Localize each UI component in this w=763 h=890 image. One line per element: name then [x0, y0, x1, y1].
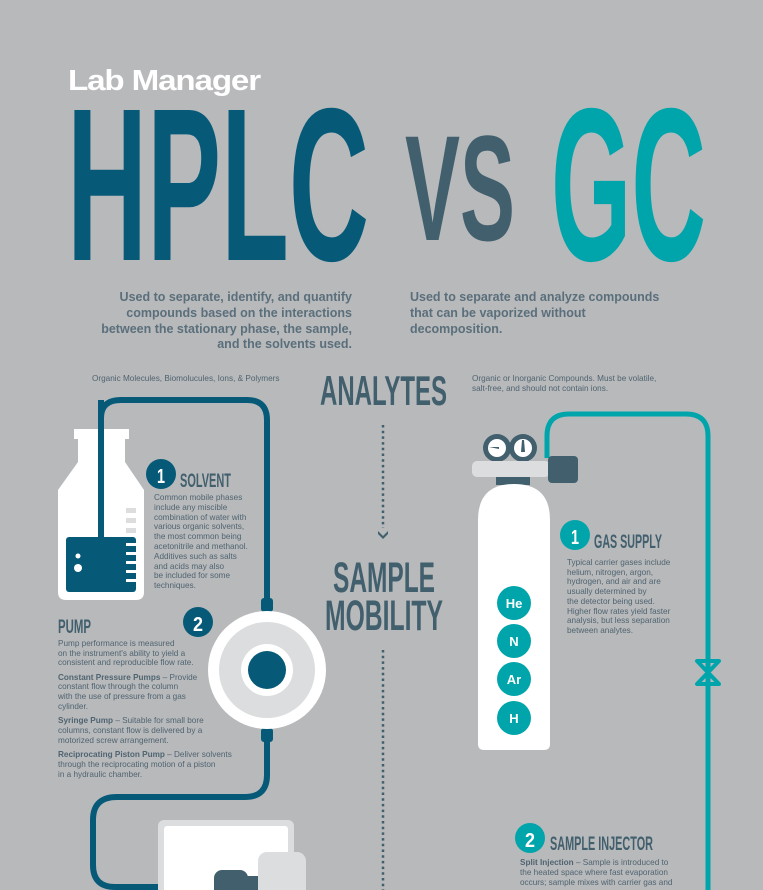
title: HPLC: HPLC	[67, 64, 369, 307]
text: HPLC description	[101, 290, 352, 351]
step 1 gas supply: between analytes.	[567, 626, 633, 635]
step 1 gas supply: the detector being used.	[567, 597, 655, 606]
text: HPLC description: Used to separate, identify, and quantify	[120, 290, 352, 304]
step 2 pump: 2	[193, 614, 203, 636]
step 1 gas supply: Higher flow rates yield faster	[567, 607, 671, 616]
icon: gas cylinder	[472, 434, 578, 750]
step 2 pump: Reciprocating Piston Pump – Deliver solvents	[58, 750, 232, 759]
step 1 solvent: include any miscible	[154, 503, 228, 512]
heading: SAMPLE MOBILITY	[325, 554, 443, 640]
text: GC analytes	[472, 374, 656, 393]
icon: gas cylinder: He	[506, 596, 522, 611]
step 1 gas supply: Typical carrier gases include	[567, 558, 671, 567]
step 2 pump: in a hydraulic chamber.	[58, 770, 142, 779]
step 2 pump: on the instrument's ability to yield a	[58, 649, 186, 658]
icon: injector box	[158, 820, 306, 890]
step 1 gas supply: analysis, but less separation	[567, 616, 670, 625]
text: HPLC description: between the stationary phase, the sample,	[101, 322, 352, 336]
step 2 pump: consistent and reproducible flow rate.	[58, 658, 194, 667]
step 2 pump: with the use of pressure from a gas	[57, 692, 186, 701]
step 2 sample injector	[515, 823, 673, 887]
text: HPLC analytes: Organic Molecules, Biomolucules, Ions, & Polymers	[92, 374, 279, 383]
text: HPLC description: and the solvents used.	[217, 337, 352, 351]
heading: SAMPLE MOBILITY: SAMPLE	[333, 554, 435, 602]
step 2 pump: Constant Pressure Pumps – Provide	[58, 673, 198, 682]
divider dots	[382, 650, 384, 890]
step 1 solvent: and acids may also	[154, 562, 225, 571]
step 2 pump: motorized screw arrangement.	[58, 736, 169, 745]
icon: gas cylinder: Ar	[507, 672, 521, 687]
step 2 pump: Syringe Pump – Suitable for small bore	[58, 716, 204, 725]
text: GC description	[410, 290, 659, 336]
step 1 solvent: SOLVENT	[180, 471, 231, 492]
text: GC description: Used to separate and analyze compounds	[410, 290, 659, 304]
icon: gas cylinder: H	[509, 711, 519, 726]
step 1 gas supply: 1	[571, 527, 579, 549]
heading: SAMPLE MOBILITY: MOBILITY	[325, 592, 443, 640]
step 2 pump: through the reciprocating motion of a piston	[58, 760, 216, 769]
step 1 solvent	[146, 459, 248, 590]
GC tubing with valve	[547, 414, 719, 890]
heading: ANALYTES: ANALYTES	[320, 367, 447, 414]
step 2 sample injector: Split Injection – Sample is introduced to	[520, 858, 669, 867]
step 2 sample injector: 2	[525, 830, 535, 852]
step 1 solvent: be included for some	[154, 571, 230, 580]
icon: gas cylinder: N	[509, 634, 519, 649]
HPLC tubing	[93, 400, 267, 887]
title: VS: VS	[405, 104, 515, 272]
text: GC analytes: Organic or Inorganic Compounds. Must be volatile,	[472, 374, 656, 383]
step 2 sample injector: the heated space where fast evaporation	[520, 868, 668, 877]
text: GC description: that can be vaporized without	[410, 306, 587, 320]
arrow: dotted down	[378, 425, 388, 539]
step 1 solvent: various organic solvents,	[154, 522, 244, 531]
step 2 pump: PUMP	[58, 617, 91, 638]
step 2 pump: columns, constant flow is delivered by a	[58, 726, 203, 735]
step 1 solvent: combination of water with	[154, 513, 247, 522]
text: HPLC description: compounds based on the interactions	[126, 306, 352, 320]
step 1 solvent: Additives such as salts	[154, 552, 237, 561]
icon: pump	[208, 598, 326, 742]
step 2 pump: constant flow through the column	[58, 682, 179, 691]
step 1 gas supply: GAS SUPPLY	[594, 532, 662, 553]
logo: Lab Manager: Lab Manager	[68, 65, 261, 97]
step 1 solvent: the most common being	[154, 532, 242, 541]
step 2 pump: cylinder.	[58, 702, 88, 711]
step 1 gas supply: hydrogen, and air and are	[567, 577, 661, 586]
step 2 pump	[57, 607, 232, 779]
step 2 sample injector: SAMPLE INJECTOR	[550, 834, 653, 855]
step 1 gas supply	[560, 520, 671, 635]
step 1 solvent: 1	[157, 466, 165, 488]
step 2 pump: Pump performance is measured	[58, 639, 175, 648]
step 1 gas supply: usually determined by	[567, 587, 648, 596]
step 2 sample injector: occurs; sample mixes with carrier gas and	[520, 878, 673, 887]
step 1 solvent: techniques.	[154, 581, 196, 590]
step 1 gas supply: helium, nitrogen, argon,	[567, 568, 653, 577]
text: GC analytes: salt-free, and should not contain ions.	[472, 384, 608, 393]
icon: solvent bottle	[58, 400, 144, 600]
text: GC description: decomposition.	[410, 322, 502, 336]
step 1 solvent: Common mobile phases	[154, 493, 242, 502]
step 1 solvent: acetonitrile and methanol.	[154, 542, 248, 551]
